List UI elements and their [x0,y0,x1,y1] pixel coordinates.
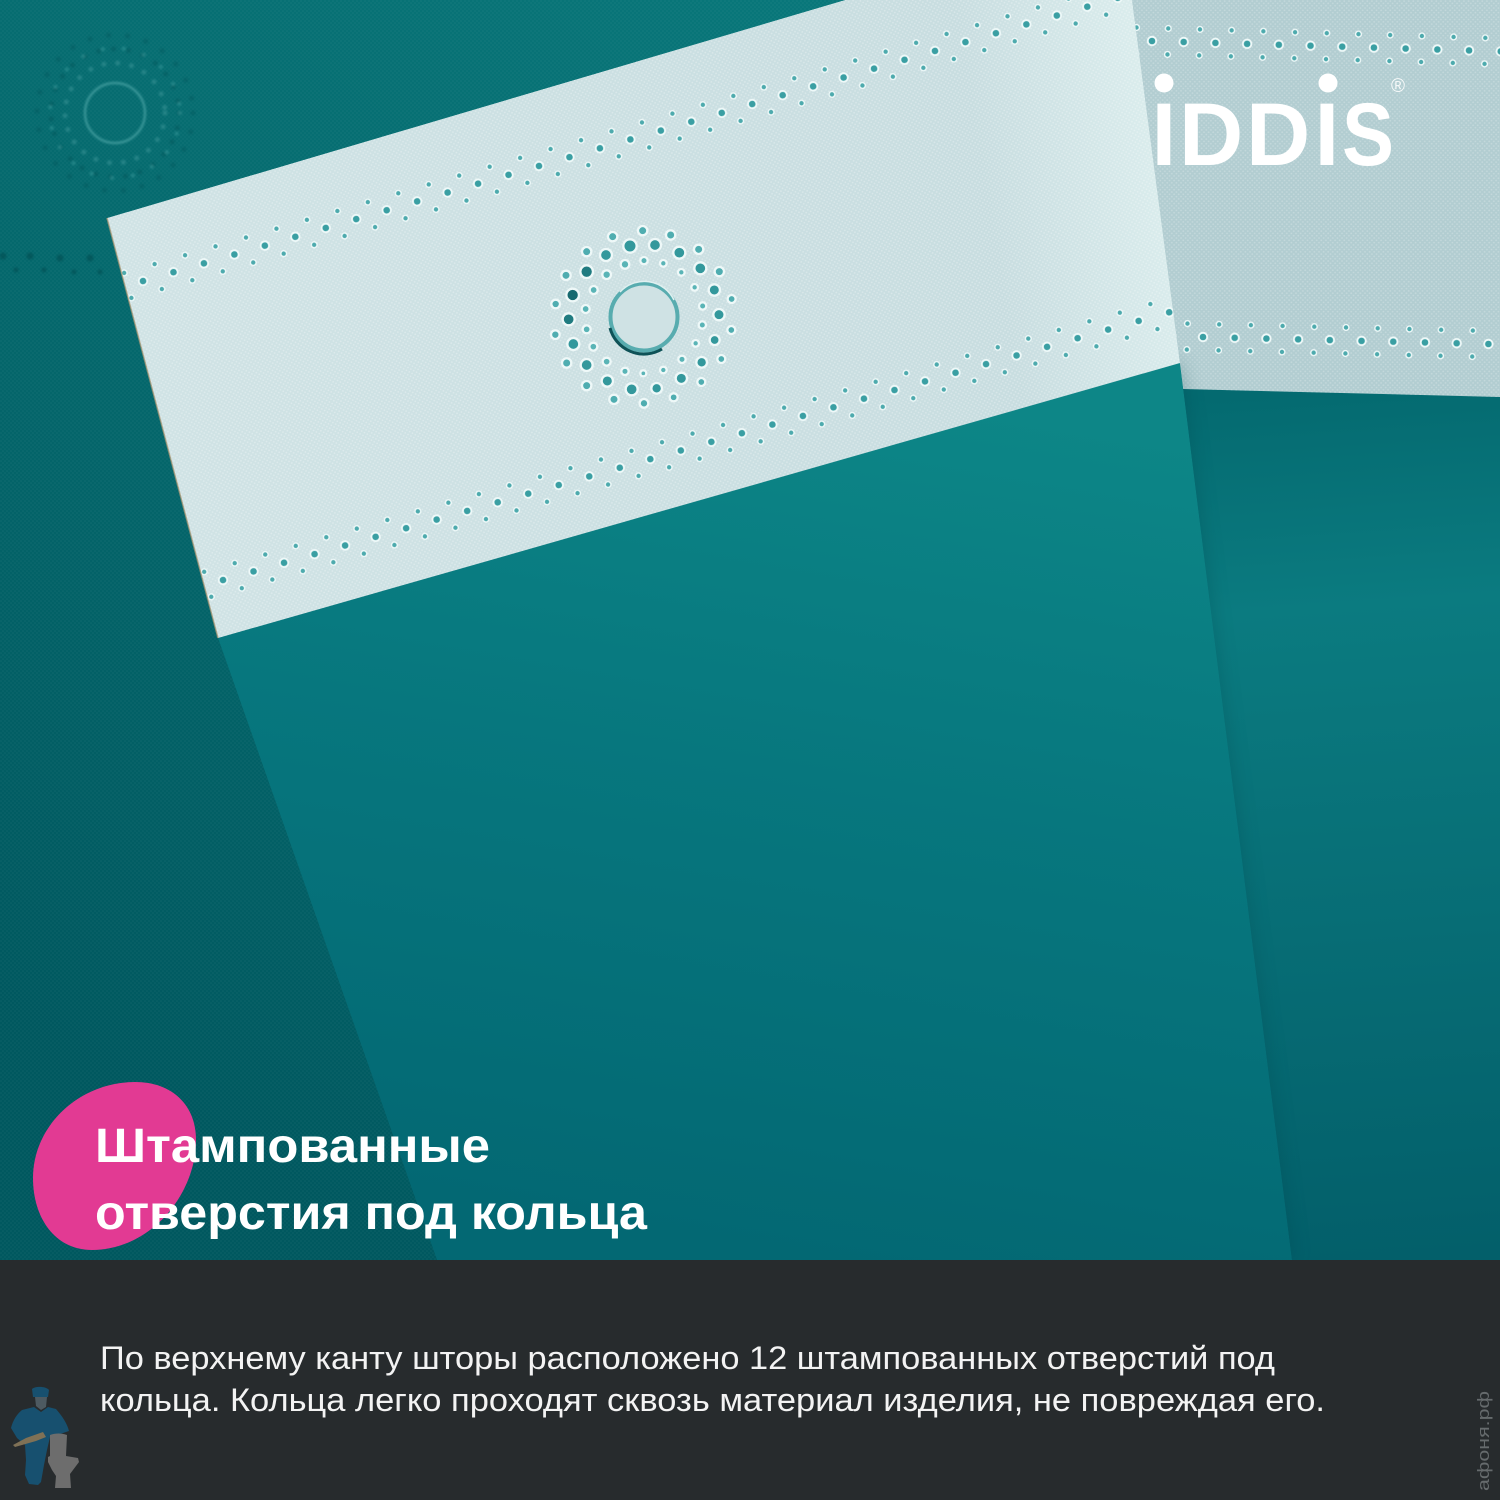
top stitching row [106,0,1165,311]
back curtain white band [1125,0,1500,397]
back curtain lower stitching [1171,314,1500,367]
middle ring of dots [563,239,725,395]
icon: plumber with toilet [11,1387,79,1488]
registered mark: ® [1391,76,1405,97]
grommet punched dots [551,226,736,408]
description text: По верхнему канту шторы расположено 12 штампованных отверстий под [100,1340,1275,1376]
watermark: афоня.рф [1474,1391,1493,1491]
wrench [13,1432,46,1447]
back band weave [1125,0,1500,397]
description text: кольца. Кольца легко проходят сквозь материал изделия, не повреждая его. [100,1382,1325,1418]
pink blob accent [33,1082,196,1250]
heading [95,1120,647,1240]
toilet [48,1434,79,1488]
IDDIS logo [1152,74,1405,184]
logo wordmark: IDDI [1152,84,1339,184]
back curtain [1121,0,1500,1260]
main curtain white band [107,0,1180,638]
ghost stitching row on background fabric [0,252,102,274]
band edge highlight [107,218,218,638]
back curtain top stitching [1121,18,1500,74]
ghost grommet on background fabric [37,35,193,191]
main curtain shadow [1160,363,1292,1260]
outer ring of dots [551,226,736,408]
back curtain teal body [1130,370,1500,1260]
heading: отверстия под кольца [95,1187,647,1240]
grommet ring [610,281,678,354]
plumber face [35,1397,47,1410]
band fabric weave [107,0,1180,638]
lower stitching row [186,287,1190,610]
description text [100,1340,1325,1418]
logo final letter: S [1342,84,1394,184]
logo i dots [1154,74,1338,92]
main curtain teal body [218,363,1292,1260]
main curtain [106,0,1292,1260]
heading: Штампованные [95,1120,490,1173]
plumber figure [11,1387,69,1485]
inner ring of dots [582,257,706,376]
bottom dark panel [0,1260,1500,1500]
